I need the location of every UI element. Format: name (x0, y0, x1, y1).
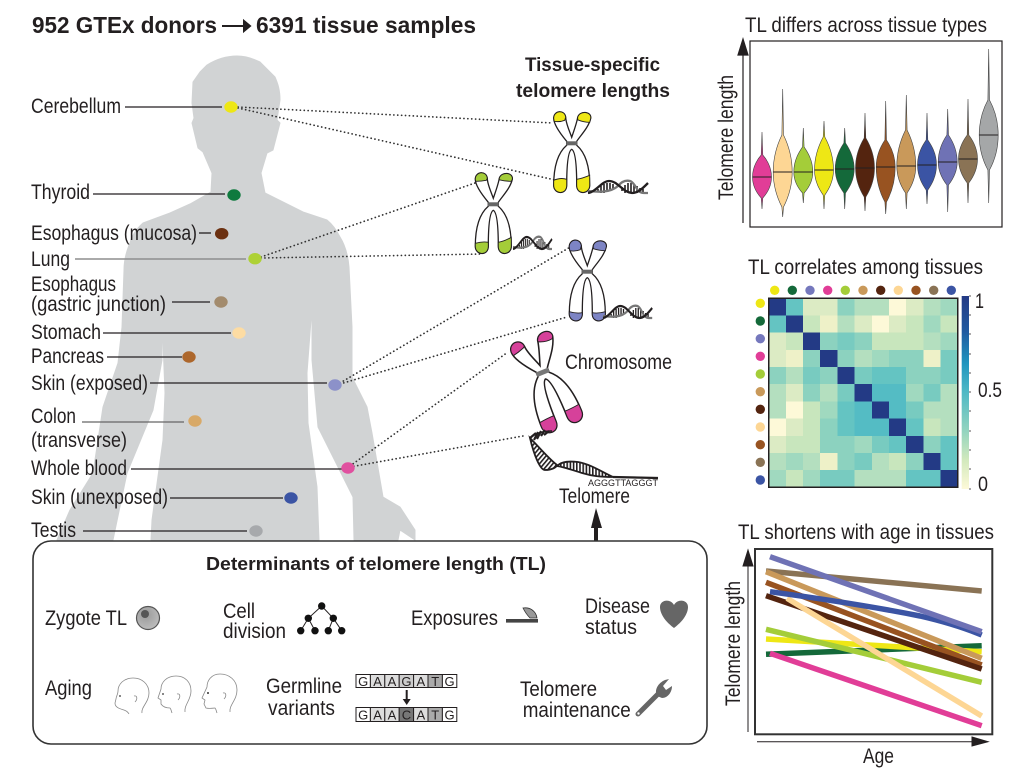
y axis arrow (743, 550, 753, 732)
item: telomere maintenance: Telomere (520, 678, 597, 701)
chromosome: periwinkle (569, 240, 606, 321)
violin: skin exposed (938, 109, 957, 212)
dotted connectors (238, 107, 572, 467)
violin: esophagus gastric junction (958, 99, 978, 203)
item: germline variants: G (358, 674, 368, 689)
heading: tissue-specific telomere lengths (516, 55, 670, 102)
y axis label: Telomere length (722, 581, 745, 706)
label: Skin unexposed (31, 486, 298, 509)
item: disease status: Disease (585, 595, 650, 618)
violin: esophagus mucosa (856, 113, 874, 211)
item: disease status (585, 595, 688, 639)
title: 6391 tissue samples (256, 12, 476, 38)
telomere helix: lime (513, 237, 552, 249)
label: Stomach: Stomach (31, 321, 101, 344)
item: disease status: status (585, 616, 637, 639)
telomere helix: periwinkle (603, 306, 652, 318)
item: germline variants: G (358, 708, 368, 722)
title (32, 12, 476, 38)
item: cell division: Cell (223, 600, 255, 623)
arrow: determinants to telomere (591, 508, 602, 542)
label: Thyroid (31, 181, 241, 204)
telomere: enlarged DNA (530, 430, 658, 478)
item: germline variants: variants (268, 697, 335, 720)
item: germline variants: A (373, 674, 382, 689)
label: Cerebellum: Cerebellum (31, 95, 121, 118)
y axis label: Telomere length (715, 75, 738, 200)
label: Colon transverse (31, 405, 202, 452)
line chart (722, 549, 992, 768)
x axis arrow (757, 737, 988, 746)
panel: determinants of telomere length (33, 541, 707, 744)
label: Esophagus mucosa: Esophagus (mucosa) (31, 222, 197, 245)
violin: cerebellum (814, 121, 834, 209)
item: germline variants: G (445, 708, 455, 722)
x axis label: Age (863, 745, 894, 768)
violin: stomach (773, 89, 792, 217)
item: germline variants: A (373, 708, 382, 722)
violin chart (715, 39, 1002, 227)
label: Telomere: Telomere (559, 485, 630, 508)
label: Whole blood: Whole blood (31, 457, 127, 480)
violin: testis (979, 49, 998, 203)
label: Lung: Lung (31, 248, 70, 271)
top legend dots (770, 286, 956, 295)
item: cell division: division (223, 620, 286, 643)
label: Pancreas (31, 345, 196, 368)
body silhouette (57, 56, 415, 540)
chromosome: yellow (554, 112, 591, 192)
violin: whole blood (752, 132, 772, 209)
label: Stomach (31, 321, 246, 344)
label: Whole blood (31, 457, 355, 480)
label: telomere sequence: AGGGTTAGGGT (588, 478, 658, 489)
label: Cerebellum (31, 95, 238, 118)
colour scale: 0.5 (978, 379, 1002, 402)
label: Skin exposed (31, 372, 342, 395)
chromosome: lime (475, 173, 512, 253)
heading: tissue-specific telomere lengths: telomere lengths (516, 81, 670, 102)
age trend lines by tissue (766, 557, 982, 726)
item: germline variants (266, 674, 457, 722)
chart title: TL differs: TL differs across tissue types (745, 14, 987, 37)
label: Colon transverse: (transverse) (31, 429, 127, 452)
item: zygote TL: Zygote TL (45, 607, 127, 630)
heading: tissue-specific telomere lengths: Tissue-specific (525, 55, 660, 76)
item: germline variants: Germline (266, 675, 342, 698)
label: Esophagus gastric junction (31, 273, 228, 316)
label: Colon transverse: Colon (31, 405, 76, 428)
item: germline variants: A (416, 674, 425, 689)
item: telomere maintenance (520, 678, 672, 722)
violin: colon (897, 95, 916, 209)
label: Pancreas: Pancreas (31, 345, 104, 368)
correlation heatmap (768, 298, 958, 488)
colour scale (962, 290, 1002, 496)
item: exposures: Exposures (411, 607, 498, 630)
colour scale: 0 (978, 473, 988, 496)
violin: thyroid (835, 128, 854, 209)
label: Testis (31, 519, 263, 542)
label: Skin exposed: Skin (exposed) (31, 372, 148, 395)
heading: determinants: Determinants of telomere length (TL) (206, 553, 546, 574)
item: germline variants: G (445, 674, 455, 689)
item: germline variants: A (388, 708, 397, 722)
item: aging (45, 674, 237, 714)
violin: lung (794, 128, 813, 203)
chart title: TL correlates: TL correlates among tissues (748, 256, 983, 279)
colour scale: 1 (975, 290, 984, 313)
label: Esophagus gastric junction: (gastric junction) (31, 293, 166, 316)
telomere helix: yellow (588, 181, 648, 193)
label: Esophagus gastric junction: Esophagus (31, 273, 116, 296)
item: germline variants: A (388, 674, 397, 689)
item: germline variants: C (402, 708, 411, 722)
title: 952 GTEx donors (32, 12, 217, 38)
label: Testis: Testis (31, 519, 76, 542)
item: germline variants: T (431, 674, 439, 689)
violin: pancreas (876, 101, 895, 214)
chromosome: pink (509, 329, 586, 435)
left legend dots (756, 299, 765, 485)
label: Skin unexposed: Skin (unexposed) (31, 486, 168, 509)
y axis arrow (738, 39, 748, 223)
label: Thyroid: Thyroid (31, 181, 90, 204)
item: aging: Aging (45, 677, 92, 700)
item: telomere maintenance: maintenance (523, 699, 631, 722)
label: Lung (31, 248, 262, 271)
violin: skin unexposed (918, 113, 936, 204)
label: Chromosome: Chromosome (565, 351, 672, 374)
item: germline variants: T (431, 708, 439, 722)
item: cell division (223, 600, 345, 643)
item: germline variants: G (401, 674, 411, 689)
item: germline variants: A (416, 708, 425, 722)
